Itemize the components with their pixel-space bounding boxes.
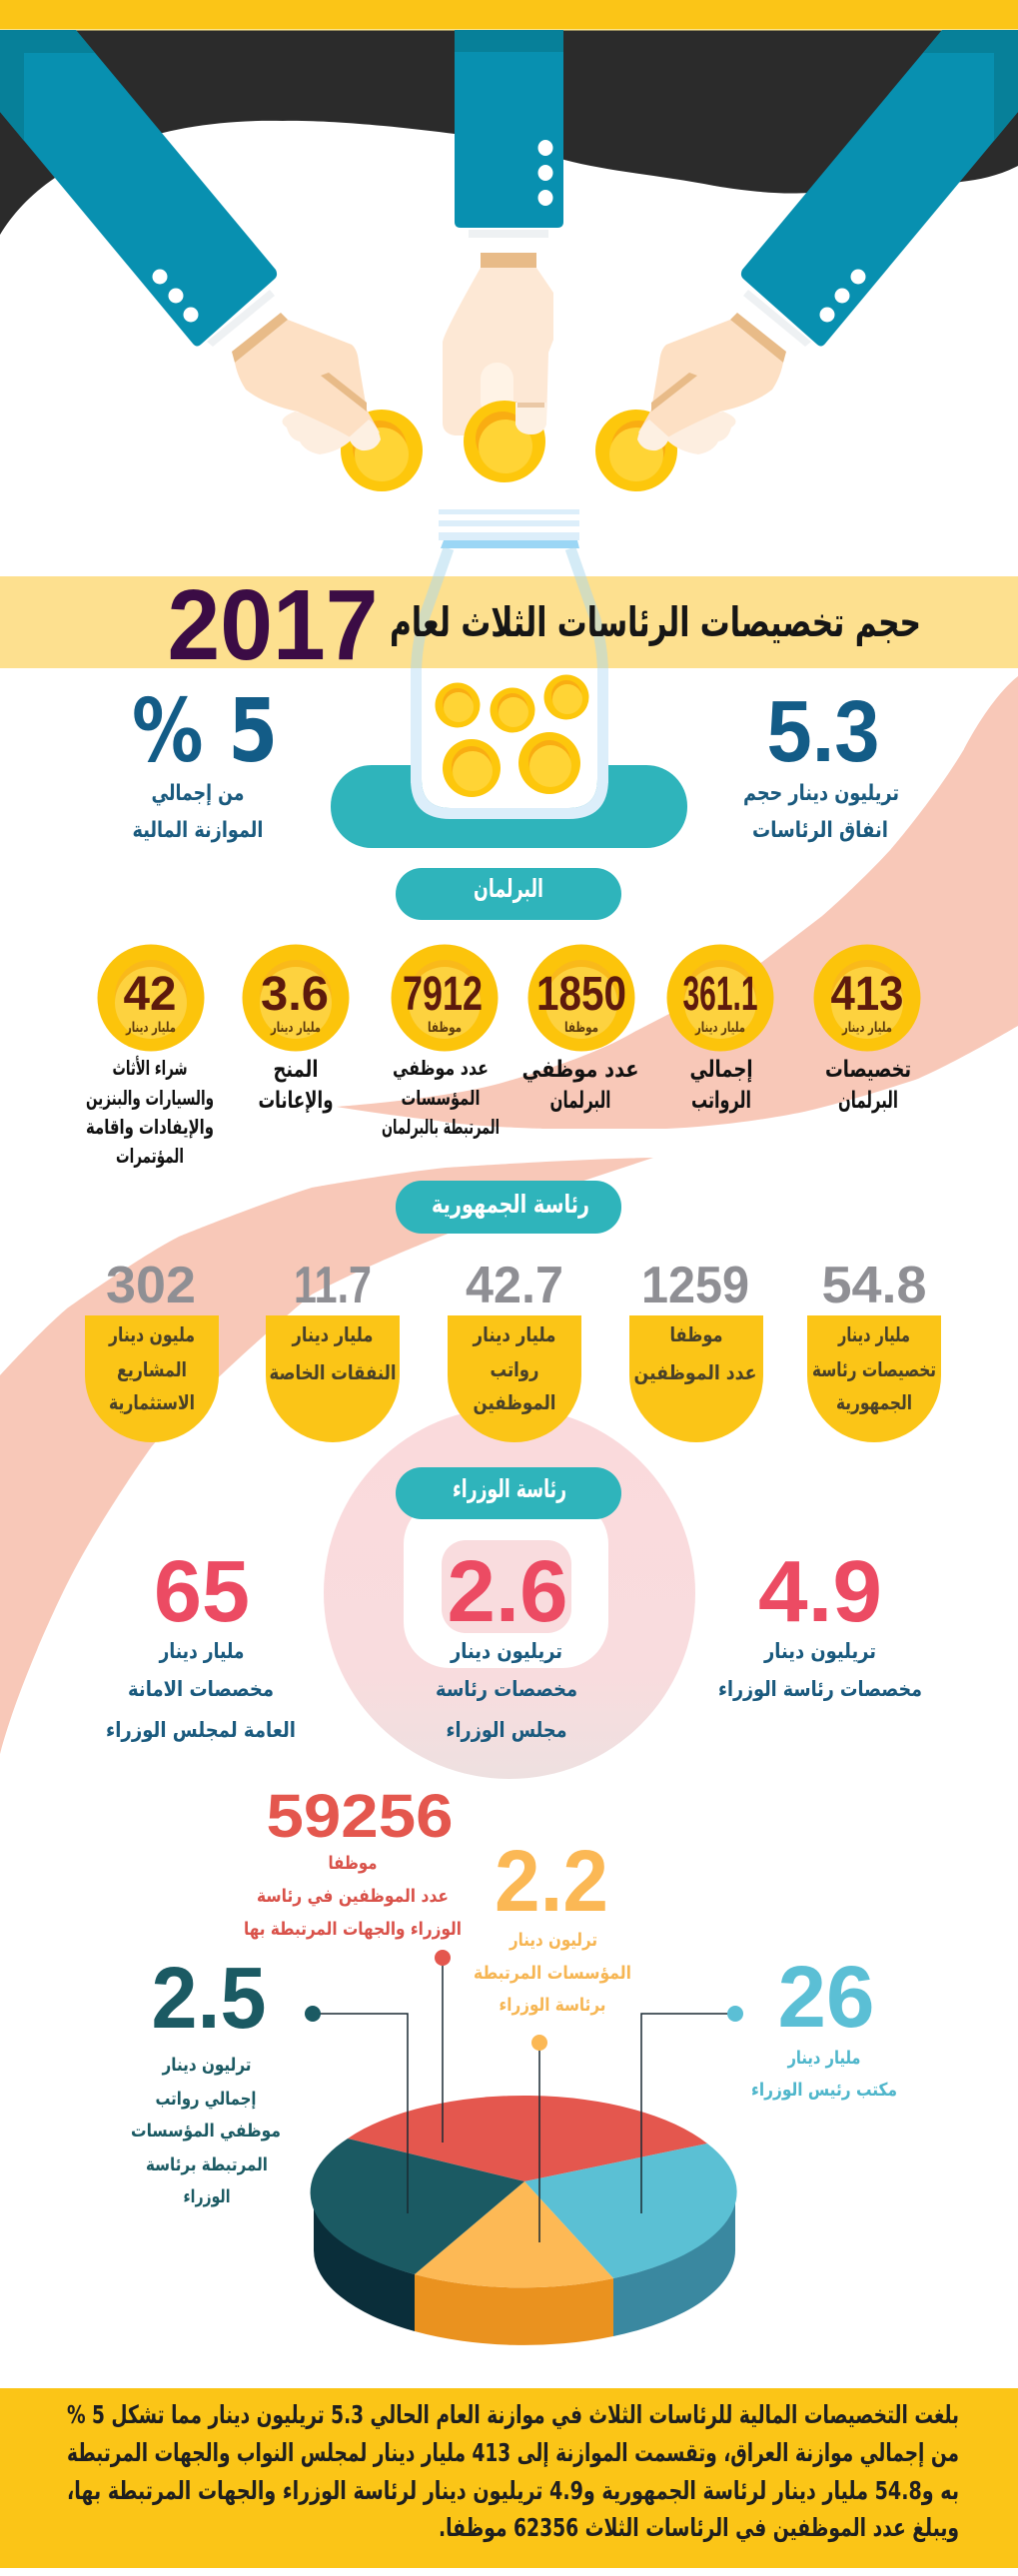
coin: 413 (813, 945, 921, 1114)
stat: 4.9 trillion: تريليون دينار (763, 1639, 876, 1663)
stat: 59256 employees (244, 1782, 462, 1940)
coin: 1850: البرلمان (549, 1088, 611, 1114)
coin: 7912: المرتبطة بالبرلمان (382, 1115, 500, 1139)
coin: 361.1: 361.1 (683, 968, 757, 1021)
stat: 4.9 trillion: 4.9 (758, 1543, 882, 1640)
shield: 1259: موظفا (669, 1322, 723, 1346)
shield: 42.7: مليار دينار (473, 1322, 555, 1346)
shield: 42.7: 42.7 (466, 1257, 563, 1314)
jar (411, 509, 608, 819)
leader: dark teal (305, 2006, 408, 2213)
stat: 65 billion: مليار دينار (159, 1639, 244, 1663)
top yellow bar (0, 0, 1018, 30)
left arm sleeve (0, 30, 277, 347)
middle arm sleeve (455, 30, 563, 238)
shield: 302: الاستثمارية (109, 1390, 195, 1414)
coin: 413: تخصيصات (825, 1057, 911, 1083)
coin: 3.6 (242, 945, 350, 1114)
stat: 4.9 trillion (718, 1543, 922, 1701)
middle hand with coin (443, 253, 553, 482)
summary band (0, 2388, 1018, 2568)
coin: 42: 42 (124, 968, 176, 1021)
shield: 302: 302 (106, 1257, 196, 1314)
stat: 59256 employees: الوزراء والجهات المرتبطة بها (244, 1919, 462, 1940)
coin: 361.1: مليار دينار (694, 1020, 745, 1036)
coin: 7912: عدد موظفي (393, 1056, 489, 1081)
stat: 59256 employees: 59256 (266, 1782, 454, 1850)
stat: 65 billion: 65 (154, 1543, 250, 1640)
background swoosh left (0, 1158, 653, 1754)
coin: 7912 (382, 945, 500, 1139)
stat: 2.6 trillion: مخصصات رئاسة (436, 1677, 577, 1701)
coins in jar (436, 675, 589, 797)
coin: 7912: 7912 (403, 968, 483, 1021)
pill: prime ministry (396, 1467, 621, 1519)
shield: 42.7: رواتب (490, 1357, 539, 1381)
coin: 42: مليار دينار (125, 1020, 176, 1036)
stat: 59256 employees: موظفا (328, 1853, 378, 1874)
stat: 2.5 trillion (131, 1950, 281, 2207)
coin: 42 (86, 945, 214, 1168)
shield: 1259 (629, 1257, 763, 1442)
stat: 2.6 trillion: مجلس الوزراء (446, 1718, 567, 1742)
stat: 2.2 trillion: 2.2 (495, 1833, 608, 1930)
coin: 7912: موظفا (428, 1020, 462, 1036)
coin: 3.6: المنح (274, 1057, 318, 1083)
coin: 42: شراء الأثاث (112, 1055, 188, 1080)
shield: 42.7 (448, 1257, 581, 1442)
shield: 54.8: 54.8 (821, 1257, 927, 1314)
title band (0, 576, 1018, 668)
stat: 2.5 trillion: الوزراء (184, 2186, 230, 2207)
coin: 361.1: إجمالي (689, 1057, 753, 1083)
stat: 5.3 trillion (743, 683, 899, 843)
right hand with coin (595, 313, 786, 491)
3D pie chart (311, 2096, 737, 2345)
shield: 302: مليون دينار (108, 1322, 195, 1346)
coin: 1850: موظفا (564, 1020, 598, 1036)
stat: 5 percent: من إجمالي (152, 781, 244, 806)
coin: 413: البرلمان (838, 1088, 898, 1114)
stat: 2.6 trillion (436, 1543, 577, 1742)
stat: 2.5 trillion: المرتبطة برئاسة (146, 2154, 268, 2175)
stat: 2.6 trillion: 2.6 (448, 1543, 567, 1640)
stat: 2.2 trillion: المؤسسات المرتبطة (474, 1963, 631, 1984)
stat: 26 billion: 26 (777, 1949, 875, 2046)
shield: 11.7 (266, 1257, 400, 1442)
stat: 2.5 trillion: إجمالي رواتب (156, 2089, 256, 2110)
shield: 54.8: الجمهورية (836, 1390, 912, 1414)
shield: 42.7: الموظفين (474, 1390, 555, 1414)
pink highlight behind 2.6 (442, 1540, 571, 1633)
pill: parliament: البرلمان (474, 874, 543, 904)
stat: 5.3 trillion: تريليون دينار حجم (743, 781, 899, 806)
pill: presidency (396, 1181, 621, 1234)
stat: 2.2 trillion: برئاسة الوزراء (500, 1995, 605, 2016)
coin: 361.1: الرواتب (691, 1088, 751, 1114)
shield: 11.7: النفقات الخاصة (270, 1360, 396, 1384)
pill: prime ministry: رئاسة الوزراء (453, 1474, 566, 1504)
stat: 2.2 trillion (474, 1833, 631, 2016)
coin: 361.1 (667, 945, 773, 1114)
stat: 59256 employees: عدد الموظفين في رئاسة (257, 1886, 449, 1907)
coin: 3.6: والإعانات (258, 1088, 334, 1114)
coin: 3.6: 3.6 (261, 968, 329, 1021)
stat: 26 billion (751, 1949, 897, 2101)
shield: 54.8: مليار دينار (837, 1322, 910, 1346)
stat: 4.9 trillion: مخصصات رئاسة الوزراء (718, 1677, 922, 1701)
coin: 42: المؤتمرات (116, 1144, 184, 1168)
large pink circle (324, 1407, 695, 1779)
shield: 302 (85, 1257, 219, 1442)
coin: 3.6: مليار دينار (270, 1020, 321, 1036)
coin: 413: مليار دينار (841, 1020, 892, 1036)
coin: 1850: عدد موظفي (521, 1057, 639, 1083)
pill: presidency: رئاسة الجمهورية (432, 1190, 589, 1220)
stat: 5.3 trillion: 5.3 (767, 683, 879, 780)
background swoosh right (337, 676, 1018, 1129)
stat: 5 percent: 5 % (132, 680, 278, 782)
dark curved backdrop (0, 30, 1018, 235)
stat: 65 billion: العامة لمجلس الوزراء (106, 1718, 296, 1742)
shield: 302: المشاريع (117, 1357, 187, 1381)
right arm sleeve (741, 30, 1018, 347)
shield: 11.7: مليار دينار (292, 1322, 374, 1346)
stat: 5 percent: الموازنة المالية (132, 818, 264, 843)
title (168, 569, 921, 681)
shield: 11.7: 11.7 (294, 1257, 372, 1314)
left hand with coin (232, 313, 423, 491)
stat: 2.6 trillion: تريليون دينار (450, 1639, 562, 1663)
jar platform (331, 765, 687, 848)
stat: 2.5 trillion: موظفي المؤسسات (131, 2121, 281, 2142)
stat: 26 billion: مليار دينار (787, 2048, 861, 2069)
shield: 54.8: تخصيصات رئاسة (812, 1357, 936, 1381)
stat: 2.2 trillion: ترليون دينار (509, 1930, 597, 1951)
coin: 1850: 1850 (536, 968, 626, 1021)
stat: 2.5 trillion: 2.5 (152, 1950, 266, 2047)
summary band: به و54.8 مليار دينار لرئاسة الجمهورية و4.9 تريليون دينار لرئاسة الوزراء والجهات المرتبطة بها، (67, 2476, 959, 2506)
stat: 5 percent (132, 680, 278, 843)
leader: orange (531, 2035, 547, 2242)
leader: light teal (641, 2006, 743, 2213)
stat: 5.3 trillion: انفاق الرئاسات (752, 818, 888, 843)
pill: parliament (396, 868, 621, 920)
white panel in circle (404, 1498, 608, 1668)
coin: 413: 413 (831, 968, 903, 1021)
title: 2017 (168, 569, 378, 681)
stat: 65 billion (106, 1543, 296, 1742)
coin: 1850 (521, 945, 639, 1114)
shield: 1259: 1259 (641, 1257, 749, 1314)
coin: 42: والإيفادات واقامة (86, 1115, 214, 1139)
shield: 1259: عدد الموظفين (633, 1360, 757, 1384)
shield: 54.8 (807, 1257, 941, 1442)
stat: 2.5 trillion: ترليون دينار (162, 2055, 252, 2076)
coin: 7912: المؤسسات (402, 1086, 480, 1110)
stat: 26 billion: مكتب رئيس الوزراء (751, 2080, 897, 2101)
stat: 65 billion: مخصصات الامانة (128, 1677, 274, 1701)
leader: red (435, 1950, 451, 2143)
coin: 42: والسيارات والبنزين (86, 1086, 214, 1110)
